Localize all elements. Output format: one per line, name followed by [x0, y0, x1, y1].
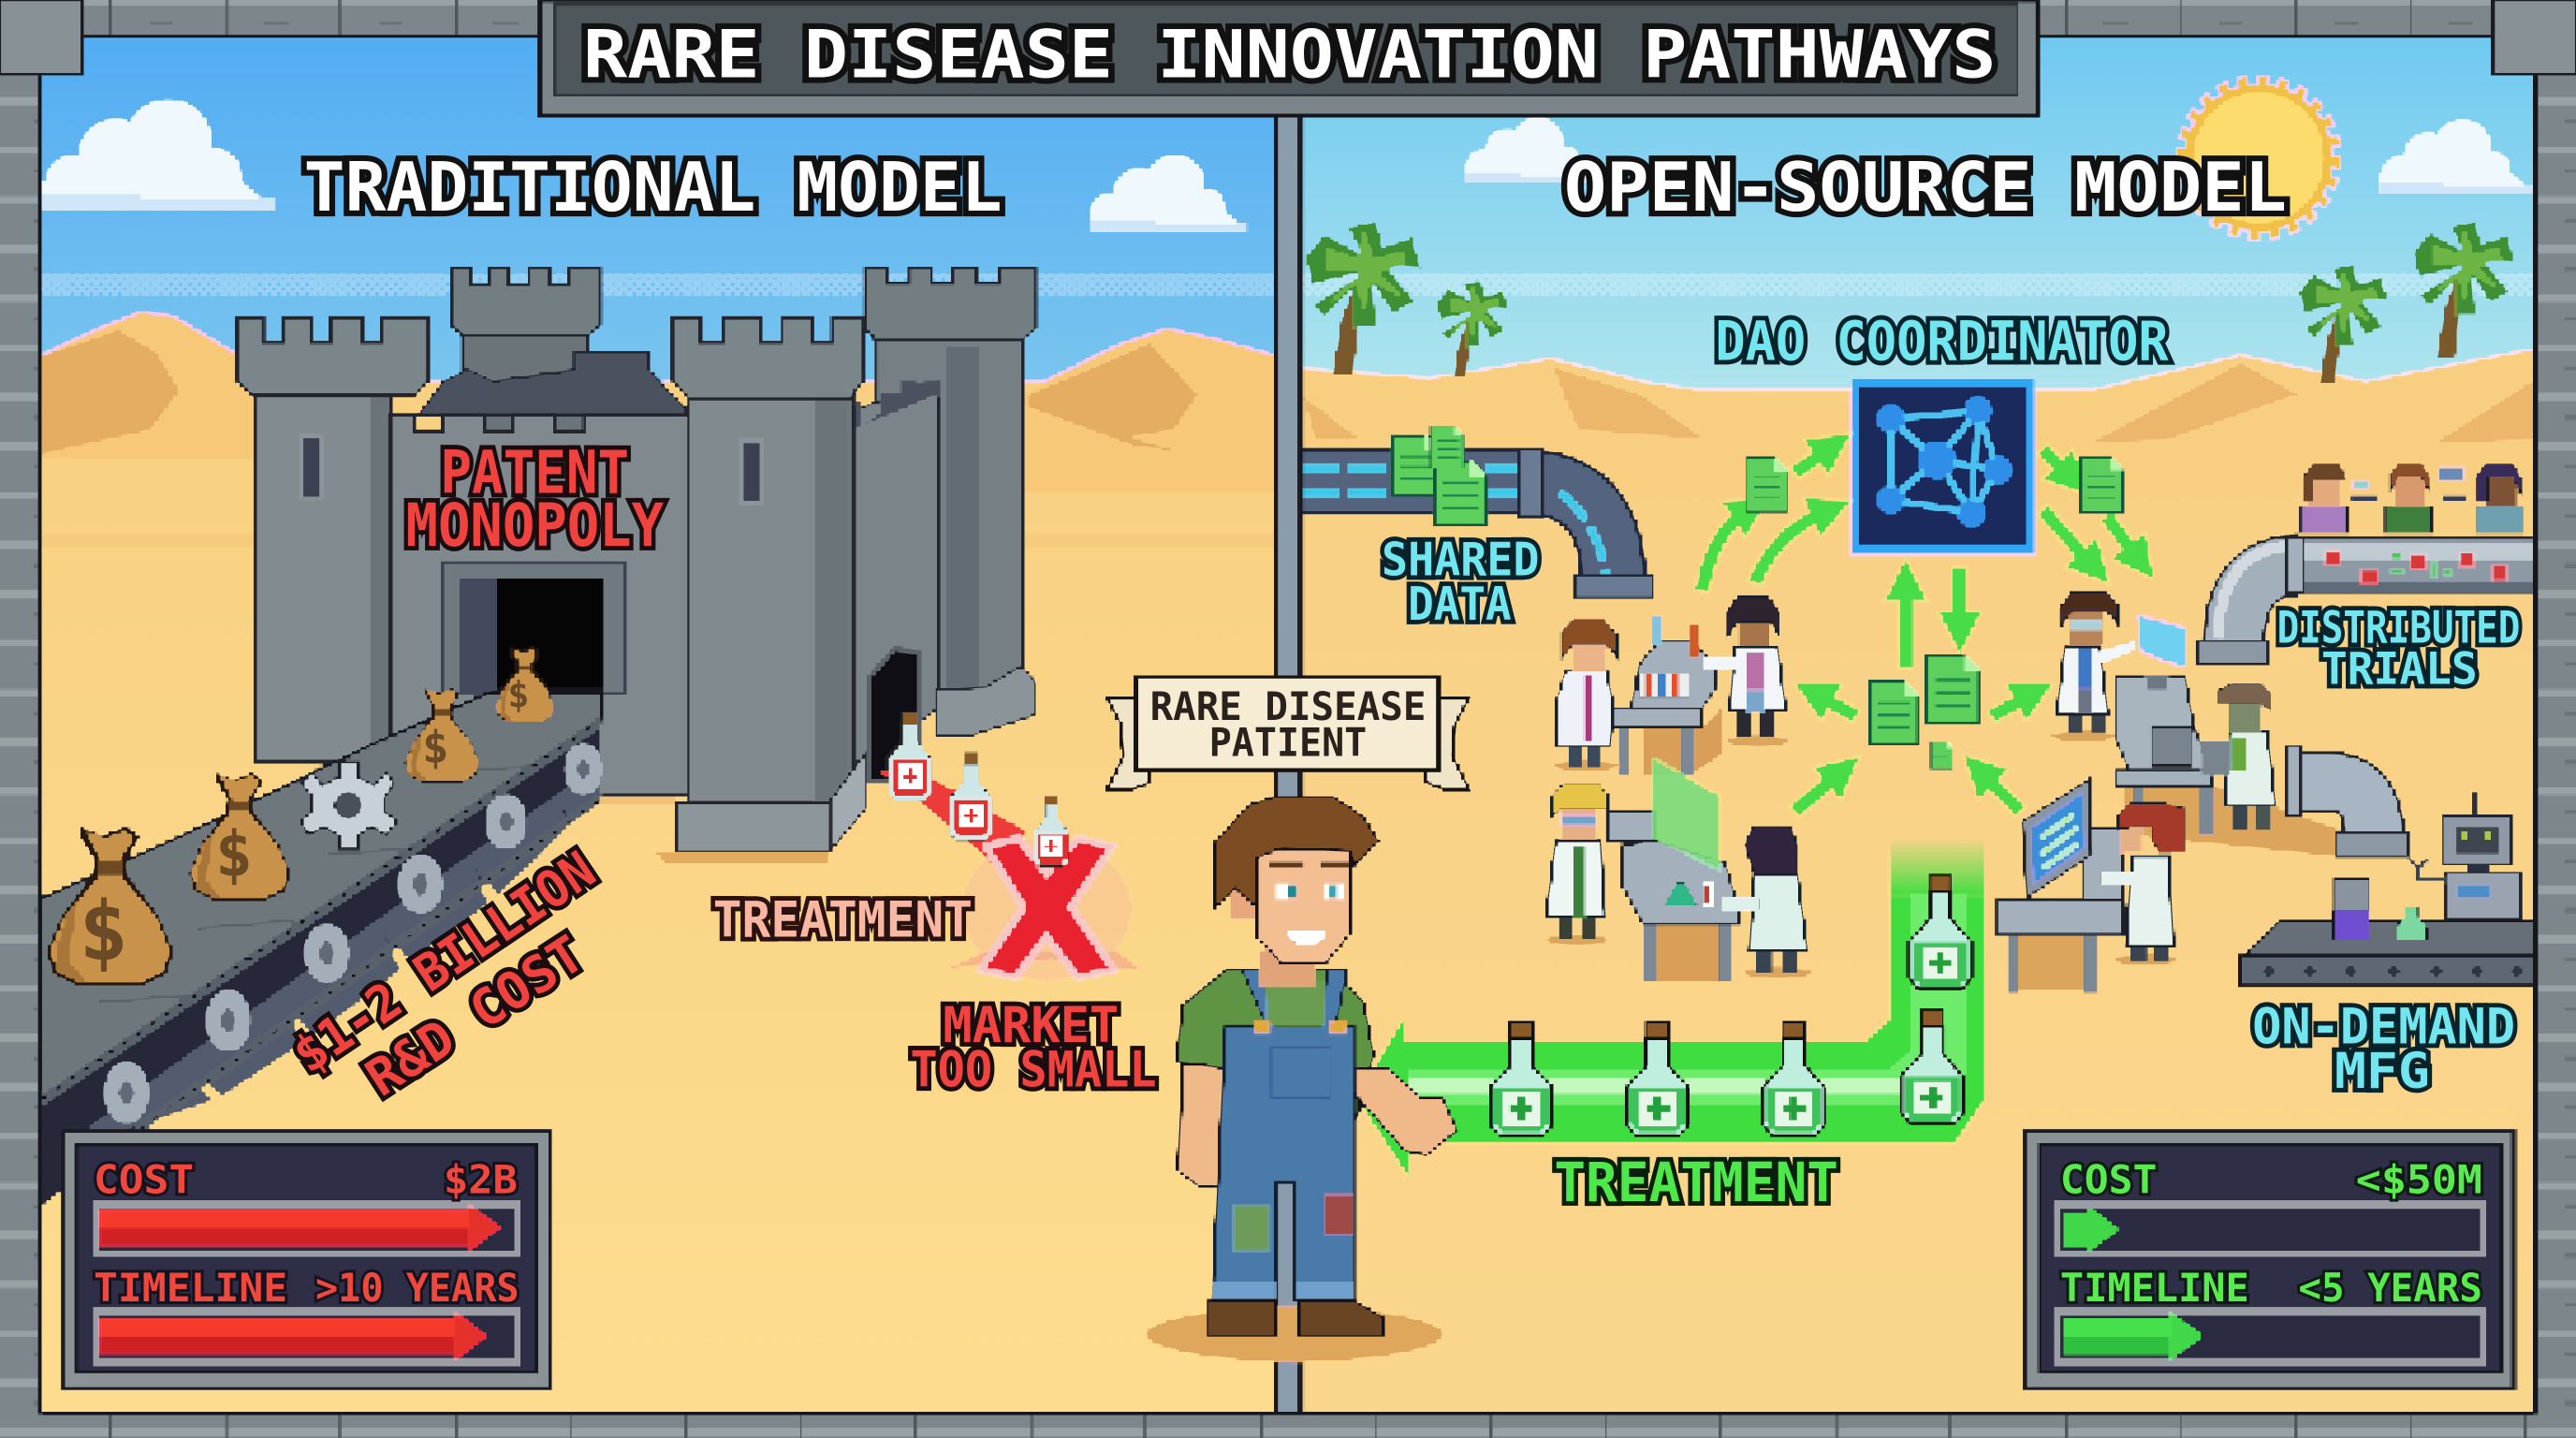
label: patent monopoly: MONOPOLY [406, 491, 664, 560]
label: distributed trials: DISTRIBUTED [2277, 602, 2520, 653]
icon: green potion 5 [1910, 876, 1971, 990]
icon: money bag 3 [403, 687, 480, 784]
label: distributed trials: TRIALS [2321, 643, 2478, 695]
traditional gauge readings: >10 YEARS [315, 1265, 520, 1311]
icon: data doc 1 [1393, 435, 1439, 494]
money bag dollar signs: $ [79, 884, 128, 979]
label: patent monopoly: PATENT [440, 438, 629, 507]
rotated label: R&D cost: R&D COST [356, 924, 594, 1108]
castle [238, 268, 1035, 864]
label: market too small: MARKET [943, 997, 1119, 1054]
machine bench [2116, 674, 2339, 858]
icon: DAO network [1855, 381, 2030, 550]
left pipe: shared data [1303, 448, 1653, 598]
icon: money bag 1 [46, 825, 174, 987]
icon: money bag 2 [188, 771, 292, 902]
label: green treatment: TREATMENT [1554, 1151, 1838, 1214]
label: market too small [910, 997, 1157, 1098]
icon: red potion 2 [949, 753, 992, 840]
icon: palm tree 1 [1305, 220, 1422, 376]
patient character [1145, 797, 1457, 1362]
lab bench 1 [1610, 616, 1721, 776]
label: distributed trials [2277, 602, 2520, 695]
open-source gauge readings: TIMELINE [2060, 1265, 2249, 1311]
panel: traditional metrics gauge [63, 1131, 550, 1388]
scientist 3 [1544, 784, 1610, 946]
scientist 1 [1553, 620, 1618, 772]
icon: red X [944, 836, 1145, 981]
traditional gauge readings: TIMELINE [94, 1265, 287, 1311]
panel: open-source model background [1303, 37, 2535, 1416]
icon: red potion 1 [888, 713, 931, 800]
icon: doc centre right [1927, 655, 1980, 723]
icon: green potion 1 [1490, 1022, 1552, 1136]
label: market too small: TOO SMALL [910, 1041, 1157, 1098]
money bag dollar signs: $ [507, 674, 530, 716]
label: on-demand mfg: MFG [2334, 1043, 2430, 1100]
computer bench [1998, 779, 2123, 992]
label: DAO coordinator: DAO COORDINATOR [1715, 310, 2169, 374]
label: patent monopoly [406, 438, 664, 560]
banner text: PATIENT [1209, 719, 1367, 765]
traditional gauge readings: COST [94, 1156, 194, 1202]
lower pipe to manufacturing [2287, 746, 2408, 857]
icon: cloud right 2 [2380, 121, 2532, 192]
banner text: RARE DISEASE [1150, 683, 1426, 729]
label: on-demand mfg [2252, 999, 2515, 1100]
open-source gauge readings: COST [2060, 1156, 2157, 1202]
panel: open-source metrics gauge [2026, 1131, 2513, 1388]
green treatment pathway [1355, 836, 1984, 1180]
money bag dollar signs: $ [422, 723, 449, 774]
open-source gauge readings: <5 YEARS [2298, 1265, 2482, 1311]
traditional gauge readings [94, 1156, 520, 1311]
icon: purple flask [2333, 879, 2369, 940]
icon: doc upper right [2080, 457, 2123, 513]
icon: data doc 3 [1431, 426, 1464, 468]
conveyor belt carrying R&D costs [41, 692, 601, 1208]
icon: doc upper left [1747, 459, 1787, 511]
icon: green potion 2 [1627, 1022, 1689, 1136]
manufacturing conveyor [2241, 920, 2535, 986]
open-source gauge readings: <$50M [2356, 1156, 2482, 1202]
scientist 5 [2050, 592, 2136, 742]
rotated label: R&D cost: $1-2 BILLION [283, 840, 606, 1085]
red blocked treatment path [882, 772, 1027, 879]
icon: money bag 4 [495, 648, 555, 724]
icon: palm tree 3 [2298, 264, 2389, 384]
open-source gauge readings [2060, 1156, 2482, 1311]
icon: cloud left 2 [1090, 156, 1247, 230]
icon: hologram tablet [2137, 615, 2185, 668]
label: shared data: SHARED [1382, 532, 1540, 586]
money bag dollar signs [79, 674, 530, 979]
banner: rare disease patient [1107, 677, 1469, 789]
label: left treatment: TREATMENT [713, 892, 973, 949]
banner text [1150, 683, 1426, 765]
green coordination arrows [1702, 448, 2136, 812]
icon: cloud left 1 [44, 100, 273, 209]
lab bench 2 [1606, 757, 1740, 981]
label: shared data: DATA [1408, 577, 1512, 631]
icon: doc centre left [1870, 682, 1919, 744]
icon: doc centre small [1931, 741, 1953, 770]
scientist 6 [2202, 683, 2276, 831]
icon: red potion 3 [1034, 796, 1069, 867]
heading: traditional model: TRADITIONAL MODEL [304, 148, 1003, 227]
icon: sun [2184, 82, 2334, 233]
icon: palm tree 2 [1436, 280, 1510, 378]
icon: cloud right 1 [1466, 119, 1598, 181]
icon: green potion 3 [1763, 1022, 1825, 1136]
icon: robot [2408, 790, 2522, 918]
title text: RARE DISEASE INNOVATION PATHWAYS [583, 17, 1996, 94]
icon: data doc 2 [1436, 462, 1486, 525]
icon: gear [300, 763, 398, 848]
label: on-demand mfg: ON-DEMAND [2252, 999, 2515, 1056]
icon: green potion 4 [1901, 1011, 1963, 1124]
panel: traditional model background [41, 37, 1275, 1416]
icon: palm tree 4 [2412, 220, 2516, 359]
scientist 4 [1721, 827, 1814, 979]
right pipe: distributed trials [2197, 537, 2535, 664]
label: shared data [1382, 532, 1540, 631]
scientist 2 [1702, 596, 1791, 748]
scientist 7 [2100, 803, 2185, 966]
money bag dollar signs: $ [215, 818, 253, 891]
traditional gauge readings: $2B [444, 1156, 518, 1202]
patients group [2300, 463, 2524, 533]
title plate [539, 0, 2037, 115]
icon: green flask [2397, 907, 2426, 940]
heading: open-source model: OPEN-SOURCE MODEL [1564, 148, 2287, 227]
